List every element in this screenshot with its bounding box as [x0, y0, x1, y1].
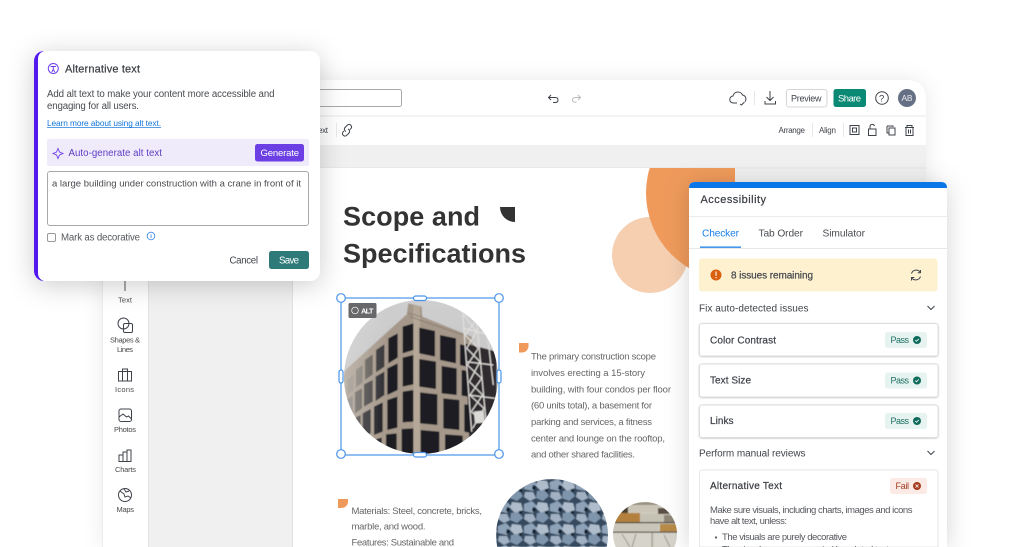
section heading: manual reviews	[699, 448, 934, 460]
selection frame and handles	[337, 294, 503, 458]
icon: link	[342, 124, 352, 136]
cancel button: Cancel	[230, 256, 258, 266]
icon: undo	[548, 95, 558, 102]
sidebar item: charts	[115, 450, 136, 474]
icon: sparkles	[53, 148, 63, 158]
secondary toolbar: ext	[318, 126, 329, 135]
sidebar item: maps	[116, 488, 134, 514]
sidebar item: icons: Icons	[115, 385, 134, 394]
sidebar item: shapes and lines	[110, 318, 140, 354]
alt text field: a large building under construction with a crane in front of it	[52, 178, 301, 190]
preview button	[786, 90, 827, 107]
icon: crop	[850, 126, 859, 134]
issues banner	[699, 258, 938, 292]
avatar	[898, 89, 916, 107]
share button: Share	[838, 93, 861, 104]
photo: stone wall	[612, 501, 680, 547]
photo: gravel	[496, 479, 609, 547]
issues banner: 8 issues remaining	[731, 270, 813, 281]
top toolbar	[103, 80, 926, 117]
dialog: alternative text	[34, 51, 320, 281]
section heading: auto-detected	[699, 304, 934, 314]
sidebar item: charts: Charts	[115, 465, 136, 474]
left sidebar	[102, 145, 149, 547]
check card: color contrast: Color Contrast	[710, 335, 776, 346]
pass badge	[885, 413, 927, 429]
sidebar item: maps: Maps	[116, 505, 134, 514]
scope paragraph: center and lounge on the rooftop,	[531, 433, 665, 444]
icon: download	[765, 91, 776, 104]
secondary toolbar: Align	[819, 126, 836, 135]
icon: trash	[905, 126, 914, 136]
materials paragraph: Materials: Steel, concrete, bricks,	[352, 506, 482, 517]
title	[343, 202, 526, 268]
materials paragraph: marble, and wood.	[352, 522, 426, 533]
section heading: auto-detected: Fix auto-detected issues	[699, 304, 808, 314]
decorative orange circle	[646, 168, 735, 268]
generate button	[255, 144, 304, 162]
pass badge	[885, 372, 927, 388]
check card: color contrast	[700, 324, 938, 356]
icon: help: ?	[879, 94, 884, 104]
guidance text: The visuals are purely decorative	[722, 532, 847, 543]
tabs: Simulator	[822, 229, 866, 240]
scope paragraph	[531, 352, 671, 461]
title: Specifications	[343, 238, 526, 268]
sidebar item: photos	[114, 409, 136, 434]
guidance text	[710, 505, 913, 547]
panel: accessibility	[689, 182, 947, 547]
sidebar item: text	[118, 281, 133, 304]
dialog heading: Alternative text	[65, 63, 140, 75]
orange marker	[338, 499, 348, 508]
tabs: Tab Order	[758, 229, 804, 240]
guidance text: Make sure visuals, including charts, images and icons	[710, 505, 913, 516]
dialog description	[47, 89, 274, 112]
icon: cloud	[730, 92, 746, 105]
learn more link: Learn more about using alt text.	[47, 118, 161, 128]
title: Scope and	[343, 202, 480, 232]
alt text field	[48, 172, 308, 226]
tabs: Checker	[702, 229, 740, 240]
orange marker	[519, 343, 528, 352]
auto-generate band	[47, 139, 309, 166]
section heading: manual reviews: Perform manual reviews	[699, 448, 806, 460]
dialog description: Add alt text to make your content more accessible and	[47, 89, 274, 100]
mark as decorative: Mark as decorative	[61, 233, 140, 244]
scope paragraph: parking and services, a fitness	[531, 417, 652, 428]
sidebar item: text: Text	[118, 296, 133, 304]
fail badge	[890, 478, 927, 494]
icon: redo	[572, 95, 580, 102]
scope paragraph: (60 units total), a basement for	[531, 401, 652, 412]
scope paragraph: and other shared facilities.	[531, 450, 635, 461]
save button: Save	[279, 256, 299, 266]
sidebar item: icons	[115, 369, 134, 394]
dialog description: engaging for all users.	[47, 101, 139, 112]
ALT badge	[348, 303, 376, 318]
check card: text size	[700, 364, 938, 397]
sidebar item: shapes and lines: Lines	[117, 345, 133, 354]
avatar: AB	[902, 93, 913, 103]
icon: lock	[868, 124, 876, 136]
generate button: Generate	[260, 148, 299, 159]
auto-generate band: Auto-generate alt text	[68, 148, 162, 159]
secondary toolbar: Arrange	[778, 126, 806, 135]
check card: alternative text: Alternative Text	[710, 481, 782, 492]
icon: copy	[887, 126, 895, 135]
pass badge: Pass	[890, 376, 910, 386]
photo: building under construction	[337, 294, 503, 458]
tabs	[700, 229, 866, 248]
icon: accessibility	[48, 64, 58, 74]
file name input	[240, 90, 402, 106]
check card: links: Links	[710, 416, 734, 427]
sidebar item: shapes and lines: Shapes &	[110, 336, 140, 344]
pass badge: Pass	[890, 416, 910, 426]
preview button: Preview	[791, 93, 822, 103]
check card: alternative text	[700, 470, 938, 547]
scope paragraph: The primary construction scope	[531, 352, 656, 362]
decorative peach circle	[612, 217, 688, 293]
scope paragraph: involves erecting a 15-story	[531, 368, 645, 379]
app window	[102, 80, 926, 547]
pass badge	[885, 332, 927, 348]
decorative dark quarter shape	[500, 207, 515, 222]
share button	[834, 89, 866, 107]
pass badge: Pass	[890, 335, 910, 345]
panel heading: Accessibility	[700, 194, 766, 206]
materials paragraph	[352, 506, 482, 547]
scope paragraph: building, with four condos per floor	[531, 384, 671, 395]
sidebar item: photos: Photos	[114, 425, 136, 434]
ALT badge: ALT	[361, 306, 374, 316]
check card: links	[700, 405, 938, 438]
document page	[292, 168, 735, 547]
save button	[269, 251, 309, 269]
fail badge: Fail	[896, 481, 909, 491]
secondary toolbar	[103, 117, 926, 145]
check card: text size: Text Size	[710, 376, 751, 387]
guidance text: have alt text, unless:	[710, 516, 787, 527]
icon: refresh	[912, 270, 920, 280]
icon: help	[876, 92, 888, 104]
